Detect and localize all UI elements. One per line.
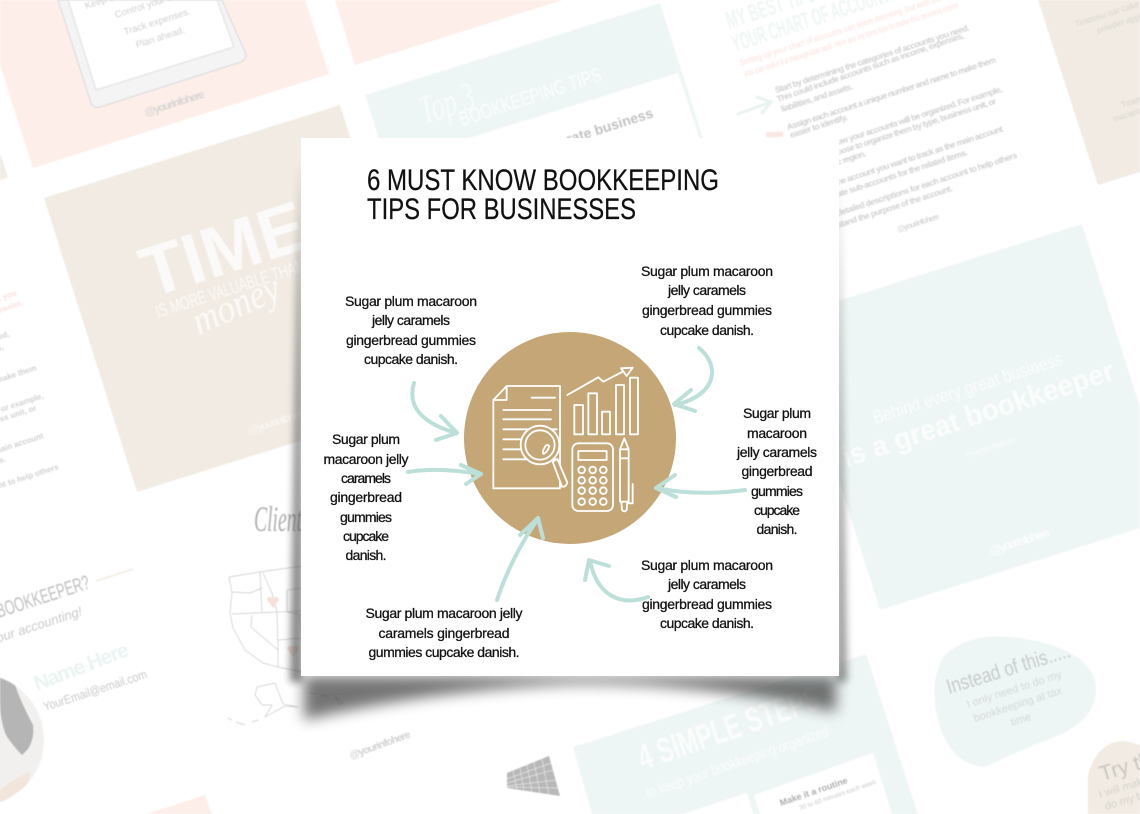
text block: tip left: caramels	[341, 470, 391, 486]
text block: tip right: cupcake	[754, 502, 800, 518]
quote author: Theresa Tadlock	[964, 435, 1016, 460]
step text: 30 to 60 minutes each week	[798, 779, 878, 812]
quote word: TIME	[131, 187, 317, 313]
heading: BOOKKEEPING TIPS	[457, 64, 604, 131]
portrait circle	[0, 672, 44, 806]
title: 6 MUST KNOW BOOKKEEPING	[367, 164, 719, 197]
text block: tip left: gummies	[340, 509, 392, 525]
tips list: Assign each account a unique number and name to make them	[786, 55, 997, 132]
blob text: I only need to do my	[965, 669, 1064, 711]
icon: pen	[620, 438, 633, 511]
text block: tip bottom: gummies cupcake danish.	[368, 644, 520, 660]
icon: bar chart	[567, 368, 638, 434]
blob text: bookkeeping at tax	[972, 685, 1064, 725]
arrow: left tip	[408, 465, 481, 484]
card shadow	[290, 160, 847, 720]
tablet text: Plan ahead.	[135, 25, 186, 51]
map of client locations	[228, 499, 343, 725]
script word: money	[184, 265, 287, 343]
main card	[301, 138, 839, 676]
blob text	[1097, 776, 1140, 813]
icon: laptop keyboard	[507, 756, 560, 796]
quote line one: Behind every great business	[870, 348, 1065, 428]
tips list: easier to identify.	[789, 112, 849, 140]
state outlines	[229, 566, 302, 672]
text block: tip upper left: cupcake danish.	[364, 351, 458, 367]
text block: tip upper right: gingerbread gummies	[642, 302, 772, 318]
arrow: upper left tip	[412, 383, 457, 440]
text block: tip lower right: Sugar plum macaroon	[641, 557, 773, 573]
tips list	[774, 22, 1019, 230]
tablet screen	[68, 0, 234, 90]
blob text	[965, 669, 1064, 729]
text block: tip left	[324, 431, 408, 563]
panel: mint quote	[787, 224, 1140, 610]
panel text	[1074, 0, 1140, 124]
quote line two: is a great bookkeeper	[838, 355, 1118, 474]
inner white card	[453, 73, 720, 230]
tips list: This could include accounts such as income, expenses,	[775, 30, 965, 104]
icon: pink mark	[766, 134, 783, 135]
panel: beige time quote	[44, 105, 433, 492]
text block: tip right: gummies	[751, 483, 803, 499]
title	[367, 164, 719, 226]
tips list: stand the purpose of the account.	[836, 183, 954, 230]
tips list: c region.	[836, 148, 867, 167]
panel: pink sliver top	[335, 0, 563, 65]
script heading: Top 3	[413, 73, 480, 133]
script heading: Client	[254, 499, 303, 539]
tips list: Start by determining the categories of accounts you need.	[774, 22, 971, 95]
icon: map hearts	[267, 597, 299, 657]
icon: magnifier	[521, 426, 567, 487]
text block: tip left: danish.	[346, 547, 386, 563]
tablet text: Track expenses.	[123, 6, 192, 38]
tip text: rate business	[564, 105, 655, 147]
tips list: oose to organize them by type, business unit, or	[836, 96, 998, 157]
icon: document	[493, 386, 560, 488]
text block: tip right	[736, 405, 817, 537]
text block: tip right: jelly caramels	[736, 444, 817, 460]
tablet mockup	[58, 0, 246, 107]
accent line	[96, 569, 133, 581]
text block: tip upper left: Sugar plum macaroon	[345, 293, 477, 309]
text block: tip upper left: jelly caramels	[371, 312, 450, 328]
handle: @yourinfohere	[896, 212, 941, 234]
panel: chart of accounts tips	[723, 0, 1019, 234]
text block: tip upper left: gingerbread gummies	[346, 332, 476, 348]
text block: tip right: macaroon	[747, 425, 807, 441]
step card left	[683, 793, 753, 814]
text block: tip right: Sugar plum	[743, 405, 811, 421]
intro text	[739, 0, 991, 79]
text block: tip upper right: Sugar plum macaroon	[641, 263, 773, 279]
step title: Make it a routine	[778, 775, 849, 808]
handle: @yourinfohere	[988, 525, 1052, 558]
text block: tip left: gingerbread	[330, 489, 402, 505]
text block: tip right: danish.	[756, 521, 798, 537]
text block: tip upper right: cupcake danish.	[660, 322, 754, 338]
text block: tip left: macaroon jelly	[324, 451, 408, 467]
arrow: bottom tip	[497, 518, 543, 600]
panel: pink tablet page	[0, 0, 329, 168]
bottom handle: @yourinfohere	[348, 729, 412, 762]
tips list: detailed descriptions for each account to help others	[836, 150, 1019, 218]
contact email: YourEmail@email.com	[42, 667, 149, 714]
left page text fragments	[0, 288, 60, 495]
text block: tip right: gingerbread	[742, 463, 812, 479]
arrow: lower right tip	[585, 560, 648, 600]
text block: tip left: Sugar plum	[332, 431, 400, 447]
panel: pink sliver bottom	[147, 795, 212, 814]
tablet text	[84, 0, 193, 51]
text block: tip left: cupcake	[343, 528, 389, 544]
heading	[723, 0, 900, 58]
heading: 4 SIMPLE STEPS	[633, 679, 825, 778]
tips list: ate sub-accounts for the related items.	[836, 147, 969, 199]
arrow: right tip	[656, 475, 745, 497]
handle: @yourinfohere	[143, 89, 206, 119]
blob: instead of this	[934, 636, 1096, 767]
subheading: to keep your bookkeeping organized	[644, 723, 831, 802]
quote line: IS MORE VALUABLE THAN	[153, 255, 307, 322]
panel: beige top right	[1038, 0, 1140, 185]
contact name: Name Here	[31, 638, 132, 696]
text block: tip upper left	[345, 293, 477, 367]
contact page	[0, 569, 149, 806]
icon: calculator	[572, 443, 613, 511]
tips list: liabilities, and assets.	[780, 81, 854, 114]
icon: mint arrow	[738, 97, 771, 114]
text block: tip bottom: caramels gingerbread	[378, 625, 510, 641]
blob heading: Instead of this.....	[944, 639, 1073, 699]
tips list: he account you want to track as the main account	[836, 124, 1004, 187]
handle: @yourinfohere	[246, 407, 309, 437]
text block: tip bottom	[366, 605, 522, 660]
text block: tip lower right	[641, 557, 773, 631]
panel: beige sliver left	[0, 153, 8, 180]
tips list: ow your accounts will be organized. For example,	[836, 84, 1003, 147]
step card	[754, 753, 892, 814]
text block: tip bottom: Sugar plum macaroon jelly	[366, 605, 522, 621]
text block: tip lower right: cupcake danish.	[660, 615, 754, 631]
text block: tip lower right: gingerbread gummies	[642, 596, 772, 612]
icon: document, chart, calculator and pen	[493, 368, 638, 511]
panel: mint four steps	[573, 654, 918, 814]
panel: mint top 3 tips	[365, 3, 720, 262]
center circle	[464, 332, 676, 544]
text block: tip upper right	[641, 263, 773, 338]
arrow: upper right tip	[674, 348, 712, 411]
blob text: time	[1009, 711, 1033, 729]
blob: try this	[1088, 741, 1140, 814]
text block: tip lower right: jelly caramels	[667, 576, 746, 592]
text block: tip upper right: jelly caramels	[667, 282, 746, 298]
alaska and hawaii	[228, 683, 343, 725]
title: TIPS FOR BUSINESSES	[367, 193, 636, 226]
